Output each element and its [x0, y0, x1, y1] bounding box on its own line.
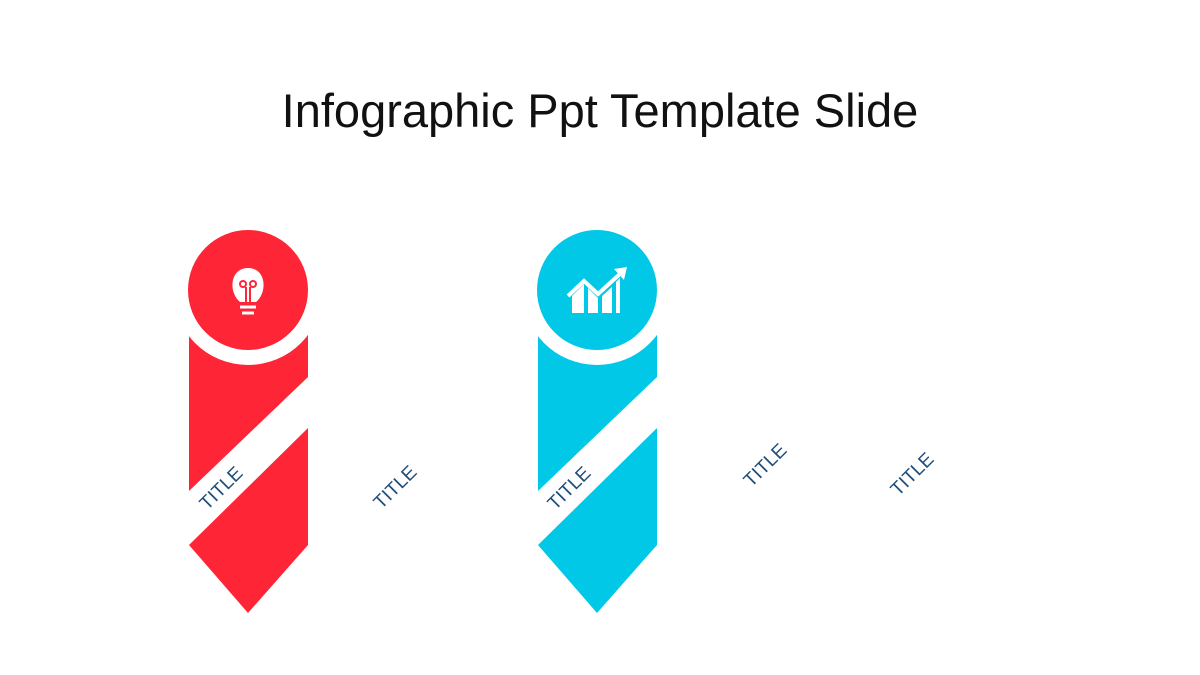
text: TITLE [887, 449, 938, 500]
icon: bulb [232, 268, 264, 313]
text: TITLE [370, 462, 421, 513]
panel: red [188, 230, 308, 613]
text: TITLE [740, 440, 791, 491]
graphic [188, 230, 657, 613]
text: TITLE [544, 463, 595, 514]
panel: cyan [537, 230, 657, 613]
title: Infographic Ppt Template Slide [282, 84, 918, 137]
icon: chart [568, 267, 627, 313]
text: titles: TITLE [196, 463, 247, 514]
